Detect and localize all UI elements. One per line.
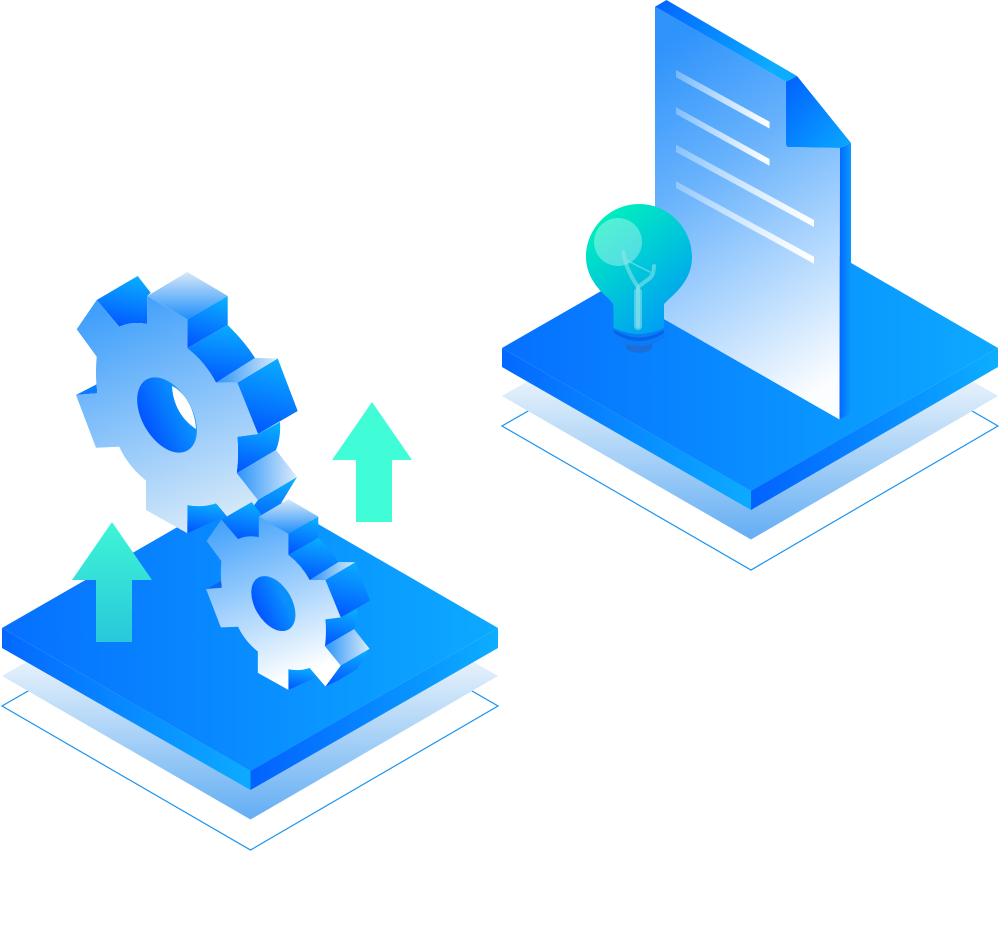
gear teeth depth <box>76 276 298 533</box>
light bulb <box>586 204 692 353</box>
bulb glass <box>586 204 692 334</box>
right platform <box>502 205 998 570</box>
document top edge <box>655 0 797 82</box>
document folded corner <box>786 76 851 148</box>
arrow: left up <box>72 522 152 642</box>
bulb filament <box>624 252 654 326</box>
gear tooth tops <box>147 272 297 500</box>
document <box>655 0 851 420</box>
small gear face <box>206 517 341 690</box>
left platform <box>2 485 498 850</box>
gear hole <box>125 367 209 463</box>
bulb screw base <box>614 324 664 353</box>
gear face <box>76 296 258 533</box>
small gear hole <box>242 569 305 639</box>
document page face <box>655 7 840 419</box>
small gear tooth tops <box>259 499 370 666</box>
small gear <box>206 499 370 690</box>
bulb highlight <box>594 218 642 266</box>
large gear <box>76 272 298 533</box>
small gear teeth depth <box>206 502 370 690</box>
arrow: right up <box>332 402 412 522</box>
document text lines <box>676 70 814 264</box>
document right edge <box>840 143 851 420</box>
